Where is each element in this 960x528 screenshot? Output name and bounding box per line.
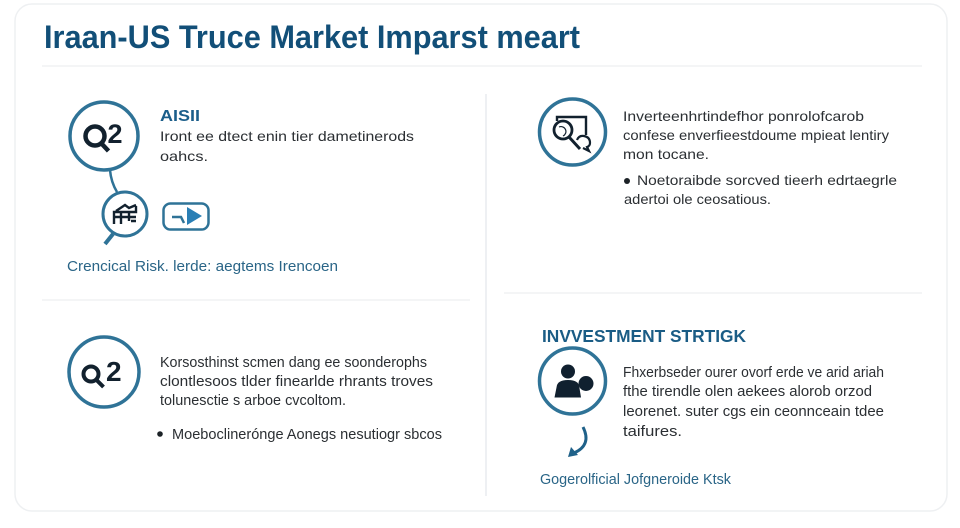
text block: fthe tirendle olen aekees alorob orzod [623, 384, 872, 400]
icon: Q2 circle [69, 337, 139, 407]
bullet text: Noetoraibde sorcved tieerh edrtaegrle [637, 172, 897, 188]
bullet text: adertoi ole ceosatious. [624, 191, 771, 207]
panel: top left [67, 102, 414, 275]
icon: arrow button [164, 204, 208, 230]
heading: AISII [160, 108, 200, 125]
caption: Crencical Risk. lerde: aegtems Irencoen [67, 259, 338, 275]
text block: tolunesctie s arboe cvcoltom. [160, 393, 346, 409]
icon: investor person [540, 348, 606, 414]
text block: confese enverfieestdoume mpieat lentiry [623, 127, 889, 143]
text block [160, 128, 414, 164]
bullet text: Moeboclinerónge Aonegs nesutiogr sbcos [172, 427, 442, 443]
bullet text [624, 172, 897, 207]
text block: Fhxerbseder ourer ovorf erde ve arid ariah [623, 365, 884, 381]
heading: INVVESTMENT STRTIGK [542, 326, 746, 346]
icon: Q2 magnifier circle [70, 102, 138, 170]
icon: small chart magnifier [103, 192, 147, 244]
text block: taifures. [623, 424, 682, 440]
text block [623, 365, 884, 440]
panel: bottom left [69, 337, 442, 443]
arrow: curved down [568, 427, 586, 457]
text block: clontlesoos tlder finearlde rhrants troves [160, 374, 433, 390]
connector line [110, 170, 117, 192]
text block: oahcs. [160, 148, 208, 164]
text block [623, 108, 889, 162]
text block: mon tocane. [623, 146, 709, 162]
caption: Gogerolficial Jofgneroide Ktsk [540, 472, 732, 488]
text block [160, 355, 433, 409]
text block: Inverteenhrtindefhor ponrolofcarob [623, 108, 864, 124]
panel: top right [540, 99, 897, 207]
icon: Q2 circle: 2 [106, 356, 122, 387]
title: Iraan-US Truce Market Imparst meart [44, 19, 580, 55]
text block: Korsosthinst scmen dang ee soonderophs [160, 355, 427, 371]
text block: leorenet. suter cgs ein ceonnceain tdee [623, 404, 884, 420]
icon: magnifier and chat [540, 99, 606, 165]
panel: bottom right [540, 326, 884, 488]
icon: Q2 magnifier circle: 2 [108, 119, 123, 149]
text block: Iront ee dtect enin tier dametinerods [160, 128, 414, 144]
